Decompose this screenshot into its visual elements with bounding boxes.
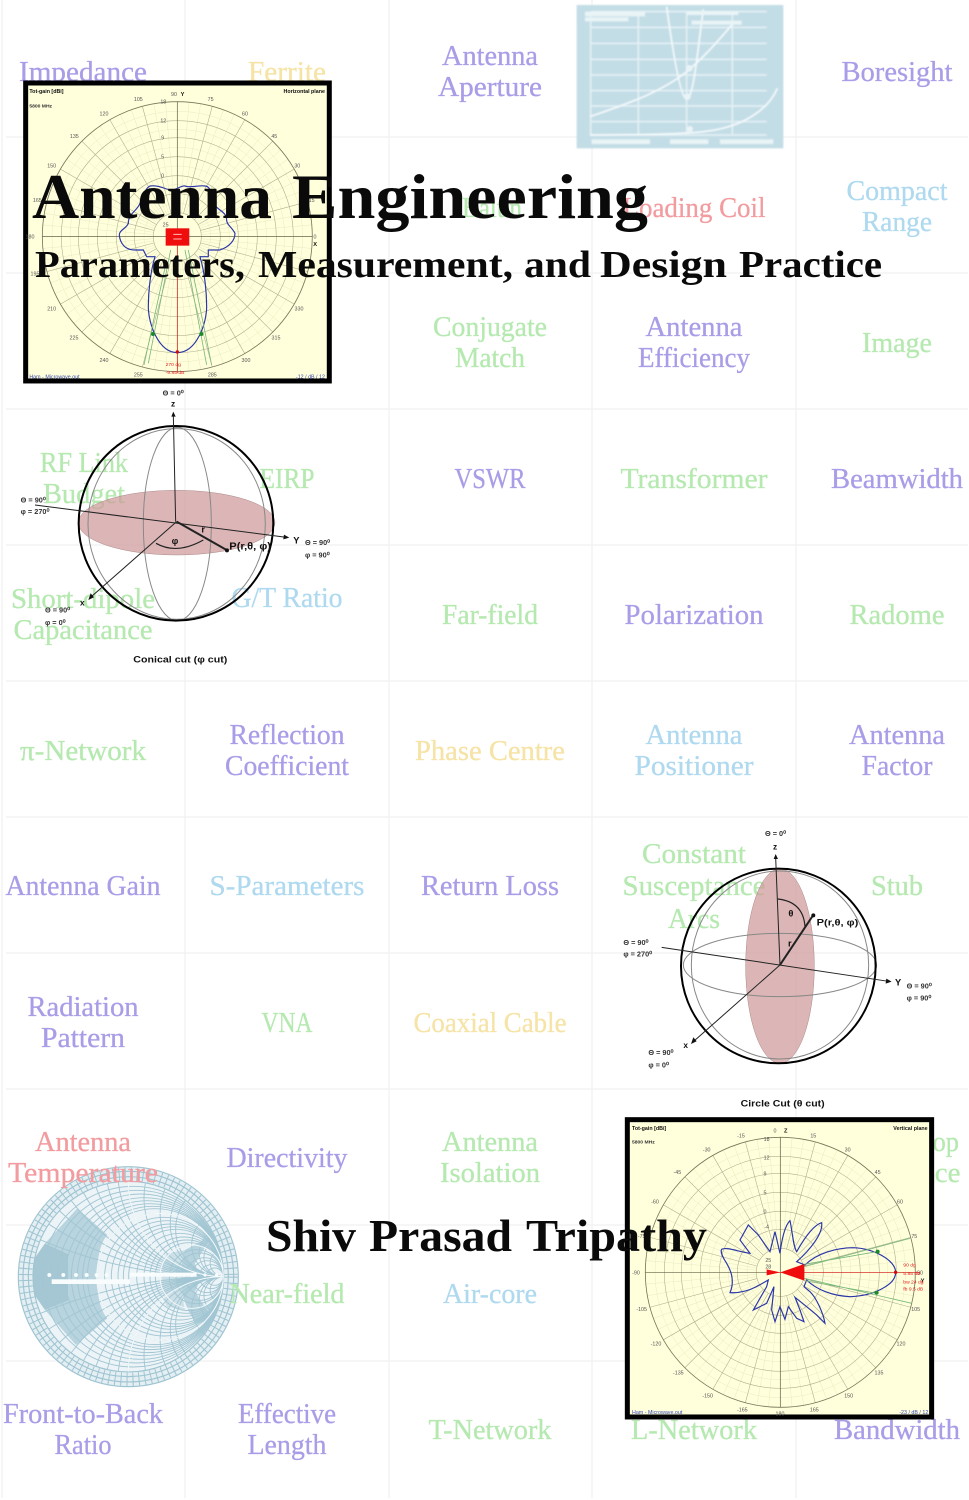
polar plot labels: 25: [765, 1258, 771, 1264]
polar plot labels: 300: [242, 358, 250, 364]
feed marker: [166, 228, 189, 246]
polar plot labels: 12: [160, 119, 166, 125]
polar plot labels: 0: [764, 1210, 767, 1216]
term: Antenna Temperature: Antenna: [35, 1127, 132, 1158]
antenna pattern trace: [721, 1221, 896, 1323]
polar plot labels: 135: [875, 1371, 883, 1377]
polar plot labels: 195: [31, 271, 39, 277]
polar plot labels: 90: [171, 92, 177, 98]
polar plot labels: -165: [737, 1407, 748, 1413]
diagram: conical cut sphere: Θ = 90⁰: [45, 606, 70, 615]
smith bright arcs: [97, 1182, 223, 1372]
term: Reflection Coefficient: [225, 720, 349, 782]
chart: vertical plane polar radiation plot: 5800 MHz: [632, 1139, 655, 1145]
term: Stub: Stub: [871, 871, 923, 902]
term: Effective Length: Effective: [238, 1399, 336, 1430]
term: EIRP: EIRP: [260, 464, 314, 495]
polar plot labels: 285: [208, 372, 217, 378]
term: Conjugate Match: [433, 312, 547, 374]
smith outer rings: [18, 1167, 238, 1387]
diagram: circle cut sphere: Y: [895, 978, 902, 988]
term: Return Loss: Return Loss: [421, 871, 559, 902]
term: π-Network: π-Network: [20, 736, 146, 767]
diagram: conical cut sphere: [21, 388, 330, 665]
polar plot labels: 120: [100, 111, 108, 117]
polar plot labels: 25: [163, 222, 169, 228]
term: Loading Coil: Loading Coil: [622, 193, 766, 224]
smith reactance arcs: [41, 1182, 223, 1372]
polar plot labels: 28: [765, 1265, 771, 1271]
diagram: circle cut sphere: [623, 829, 932, 1109]
polar plot labels: 165: [810, 1407, 819, 1413]
polar plot labels: 90: [917, 1270, 923, 1276]
term: Short-dipole Capacitance: Short-dipole: [11, 584, 155, 615]
term: Antenna Efficiency: [638, 312, 750, 374]
chart: horizontal plane polar radiation plot: -12 / dB / 12: [296, 374, 325, 380]
term: partly hidden label behind the chart: Impedance: [834, 1158, 960, 1189]
title: [32, 161, 648, 232]
term: Antenna Positioner: [634, 720, 754, 782]
term: Conjugate Match: Conjugate: [433, 312, 547, 343]
chart: horizontal plane polar radiation plot: 5800 MHz: [29, 103, 53, 109]
diagram: conical cut sphere: P(r,θ, φ): [229, 541, 271, 552]
term: Image: Image: [862, 328, 932, 359]
antenna pattern trace: [119, 186, 235, 353]
diagram: circle cut sphere: Θ = 90⁰: [648, 1048, 674, 1057]
term: Effective Length: Length: [248, 1430, 326, 1461]
chart: vertical plane polar radiation plot: Z: [784, 1129, 788, 1135]
diagram: conical cut sphere: φ = 270⁰: [21, 507, 49, 516]
polar plot labels: 15: [810, 1133, 816, 1139]
polar plot labels: 120: [897, 1341, 905, 1347]
polar plot labels: 30: [294, 163, 300, 169]
polar plot labels: 75: [208, 97, 214, 103]
polar plot labels: 180: [26, 235, 34, 241]
polar plot labels: 105: [911, 1307, 920, 1313]
title: Antenna: [32, 161, 272, 232]
subtitle: [35, 244, 882, 286]
diagram: conical cut sphere: φ: [172, 536, 179, 546]
author: Prasad: [369, 1210, 512, 1261]
term: Antenna Isolation: [440, 1127, 540, 1189]
term: Compact Range: Compact: [846, 176, 948, 207]
chart: horizontal plane polar radiation plot: Tot-gain [dBi]: [29, 89, 64, 95]
term: Front-to-Back Ratio: Ratio: [54, 1430, 112, 1461]
chart: vertical plane polar radiation plot: bw 24 dg: [903, 1279, 924, 1285]
diagram: circle cut sphere: Θ = 90⁰: [623, 938, 649, 947]
polar plot labels: 18: [160, 100, 166, 106]
term: Reflection Coefficient: Reflection: [230, 720, 344, 751]
term: L-Network: L-Network: [631, 1415, 757, 1446]
conical cut pink plane: [78, 490, 275, 555]
image: faded Smith chart: [18, 1167, 238, 1387]
term: Bandwidth: Bandwidth: [834, 1415, 960, 1446]
term: RF Link Budget: RF Link: [40, 448, 128, 479]
polar plot labels: 240: [100, 358, 108, 364]
diagram: conical cut sphere: φ = 90⁰: [305, 550, 330, 559]
polar plot labels: 9: [764, 1171, 767, 1177]
polar plot labels: -60: [651, 1200, 659, 1206]
polar plot labels: 165: [33, 198, 42, 204]
polar plot labels: 9: [161, 135, 164, 141]
diagram: circle cut sphere: x: [683, 1040, 688, 1050]
term: Polarization: Polarization: [624, 600, 764, 631]
term: Effective Length: [238, 1399, 336, 1461]
term: Constant Susceptance Arcs: Susceptance: [622, 871, 766, 902]
term: Reflection Coefficient: Coefficient: [225, 751, 349, 782]
chart: horizontal plane polar radiation plot: Y: [181, 92, 185, 98]
polar plot labels: 0: [161, 174, 164, 180]
subtitle: Parameters,: [35, 244, 245, 286]
chart: vertical plane polar radiation plot: 5.85 dB: [903, 1271, 921, 1277]
term: Air-core: Air-core: [443, 1279, 537, 1310]
term: Compact Range: [846, 176, 948, 238]
term: Antenna Gain: Antenna Gain: [6, 871, 160, 902]
beamwidth and main lobe markers: [804, 1238, 912, 1303]
polar plot labels: 315: [272, 335, 280, 341]
term: Antenna Factor: Factor: [862, 751, 933, 782]
chart: vertical plane polar radiation plot: Y: [921, 1279, 925, 1285]
term: Antenna Efficiency: Efficiency: [638, 343, 750, 374]
polar plot labels: -4: [764, 1225, 769, 1231]
term: Constant Susceptance Arcs: [622, 839, 766, 935]
term: Antenna Efficiency: Antenna: [646, 312, 743, 343]
polar plot labels: 75: [911, 1234, 917, 1240]
polar plot labels: 150: [844, 1393, 853, 1399]
diagram: circle cut sphere: Θ = 90⁰: [907, 981, 932, 990]
diagram: conical cut sphere: Θ = 90⁰: [21, 496, 46, 505]
diagram: circle cut sphere: θ: [788, 909, 793, 919]
polar plot labels: 255: [134, 372, 143, 378]
chart: vertical plane polar radiation plot: [627, 1120, 932, 1417]
term: Antenna Temperature: Temperature: [8, 1158, 158, 1189]
diagram: conical cut sphere: x: [80, 597, 85, 607]
diagram: conical cut sphere: Y: [293, 535, 300, 545]
term: Far-field: Far-field: [442, 600, 538, 631]
chart: vertical plane polar radiation plot: Ham - Microwave.out: [632, 1410, 683, 1416]
polar plot labels: -90: [632, 1270, 640, 1276]
term: Boresight: Boresight: [842, 57, 953, 88]
term: Balun: Balun: [462, 193, 522, 224]
author: [266, 1210, 707, 1261]
polar plot labels: 5: [764, 1190, 767, 1196]
diagram: conical cut sphere: Θ = 90⁰: [305, 538, 330, 547]
diagram: conical cut sphere: r: [201, 525, 205, 535]
diagram: circle cut sphere: φ = 90⁰: [907, 993, 931, 1002]
term: Near-field: Near-field: [230, 1279, 344, 1310]
polar plot labels: 225: [70, 335, 78, 341]
term: Directivity: Directivity: [226, 1143, 348, 1174]
subtitle: Practice: [739, 244, 882, 286]
polar plot labels: 210: [47, 306, 56, 312]
term: Ferrite: Ferrite: [248, 57, 326, 88]
term: Transformer: Transformer: [620, 464, 768, 495]
diagram: conical cut sphere: φ = 0⁰: [45, 618, 66, 627]
chart: horizontal plane polar radiation plot: [26, 83, 329, 381]
term: Antenna Aperture: Antenna: [442, 41, 539, 72]
polar plot labels: 12: [764, 1155, 770, 1161]
term: Coaxial Cable: Coaxial Cable: [414, 1008, 566, 1039]
term: Radiation Pattern: Radiation: [28, 992, 138, 1023]
smith resistance circles: [43, 1186, 223, 1367]
polar plot labels: 105: [134, 97, 143, 103]
subtitle: and: [524, 244, 591, 286]
term: VNA: VNA: [262, 1008, 313, 1039]
subtitle: Measurement,: [258, 244, 513, 286]
term: Antenna Temperature: [8, 1127, 158, 1189]
author: Shiv: [266, 1210, 356, 1261]
chart: vertical plane polar radiation plot: Vertical plane: [893, 1126, 928, 1132]
polar plot labels: -105: [636, 1307, 647, 1313]
term: Short-dipole Capacitance: [11, 584, 155, 646]
polar plot labels: 180: [776, 1411, 784, 1417]
diagram: circle cut sphere: φ = 270⁰: [623, 950, 652, 959]
feed wedge: [767, 1264, 804, 1281]
polar plot labels: 18: [764, 1137, 770, 1143]
term: Short-dipole Capacitance: Capacitance: [14, 615, 152, 646]
chart: vertical plane polar radiation plot: fb 9.5 dB: [903, 1287, 924, 1293]
diagram: conical cut sphere: z: [171, 399, 175, 409]
chart: horizontal plane polar radiation plot: 270 dg: [166, 362, 181, 368]
term: VSWR: VSWR: [454, 464, 526, 495]
term: Radiation Pattern: [28, 992, 138, 1054]
term: Phase Centre: Phase Centre: [415, 736, 565, 767]
polar plot labels: 5: [161, 154, 164, 160]
term: Antenna Isolation: Antenna: [442, 1127, 539, 1158]
polar plot labels: -45: [673, 1170, 681, 1176]
author: Tripathy: [526, 1210, 707, 1261]
term: Radome: Radome: [850, 600, 944, 631]
term: Beamwidth: Beamwidth: [831, 464, 963, 495]
term: Compact Range: Range: [862, 207, 932, 238]
term: Constant Susceptance Arcs: Arcs: [668, 904, 720, 935]
polar plot labels: 0: [313, 235, 316, 241]
term: Antenna Positioner: Antenna: [646, 720, 743, 751]
polar plot labels: 45: [271, 134, 277, 140]
term: Antenna Aperture: Aperture: [438, 72, 542, 103]
polar plot labels: 0: [773, 1129, 776, 1135]
image: faded VNA trace screenshot: [577, 5, 783, 148]
title: Engineering: [292, 161, 648, 232]
term: partly hidden label behind the chart: [834, 1127, 960, 1189]
term: G/T Ratio: G/T Ratio: [232, 583, 342, 614]
polar plot labels: 15: [309, 198, 315, 204]
chart: vertical plane polar radiation plot: 90 dg: [903, 1263, 916, 1269]
polar plot labels: 60: [897, 1200, 903, 1206]
polar plot labels: -120: [651, 1341, 661, 1347]
chart: horizontal plane polar radiation plot: Ham - Microwave.out: [29, 374, 80, 380]
polar plot labels: -30: [703, 1147, 711, 1153]
polar plot labels: -135: [673, 1371, 684, 1377]
term: Antenna Factor: Antenna: [849, 720, 946, 751]
chart: horizontal plane polar radiation plot: X: [313, 242, 317, 248]
polar plot labels: 45: [875, 1170, 881, 1176]
polar plot labels: 330: [295, 306, 303, 312]
term: Antenna Aperture: [438, 41, 542, 103]
polar plot labels: [632, 1129, 923, 1417]
beamwidth and main lobe markers: [144, 250, 212, 365]
diagram: circle cut sphere: P(r,θ, φ): [817, 917, 858, 927]
diagram: conical cut sphere: Conical cut (φ cut): [133, 655, 227, 665]
term: Antenna Isolation: Isolation: [440, 1158, 540, 1189]
term: S-Parameters: S-Parameters: [210, 871, 364, 902]
polar plot labels: -75: [638, 1234, 646, 1240]
term: RF Link Budget: Budget: [43, 479, 125, 510]
polar plot labels: 30: [845, 1147, 851, 1153]
diagram: conical cut sphere: Θ = 0⁰: [163, 388, 184, 397]
term: T-Network: T-Network: [428, 1415, 552, 1446]
subtitle: Design: [600, 244, 727, 286]
diagram: circle cut sphere: Circle Cut (θ cut): [741, 1099, 825, 1109]
diagram: circle cut sphere: r: [788, 939, 792, 949]
term: Front-to-Back Ratio: [3, 1399, 163, 1461]
chart: horizontal plane polar radiation plot: Horizontal plane: [284, 89, 325, 95]
diagram: circle cut sphere: z: [773, 841, 777, 851]
smith shaded regions: [33, 1208, 213, 1345]
diagram: circle cut sphere: Θ = 0⁰: [765, 829, 786, 838]
polar plot labels: 135: [70, 134, 79, 140]
chart: vertical plane polar radiation plot: Tot-gain [dBi]: [632, 1126, 666, 1132]
polar plot labels: 150: [47, 163, 56, 169]
term: Antenna Positioner: Positioner: [634, 751, 754, 782]
chart: vertical plane polar radiation plot: -23 / dB / 12: [899, 1410, 928, 1416]
term: partly hidden label behind the chart: Small Loop: [835, 1127, 959, 1158]
chart: horizontal plane polar radiation plot: -9.85 dB: [166, 370, 185, 376]
term: Conjugate Match: Match: [455, 343, 525, 374]
term: Antenna Factor: [849, 720, 946, 782]
polar plot labels: -15: [737, 1133, 745, 1139]
circle cut pink plane: [746, 869, 814, 1063]
term: Impedance: Impedance: [19, 57, 147, 88]
term: RF Link Budget: [40, 448, 128, 510]
polar plot labels: -150: [702, 1393, 713, 1399]
polar plot labels: 60: [242, 111, 248, 117]
term: Constant Susceptance Arcs: Constant: [642, 839, 746, 870]
term: Front-to-Back Ratio: Front-to-Back: [3, 1399, 163, 1430]
diagram: circle cut sphere: φ = 0⁰: [648, 1060, 669, 1069]
polar plot labels: [26, 92, 316, 378]
term: Radiation Pattern: Pattern: [41, 1023, 125, 1054]
